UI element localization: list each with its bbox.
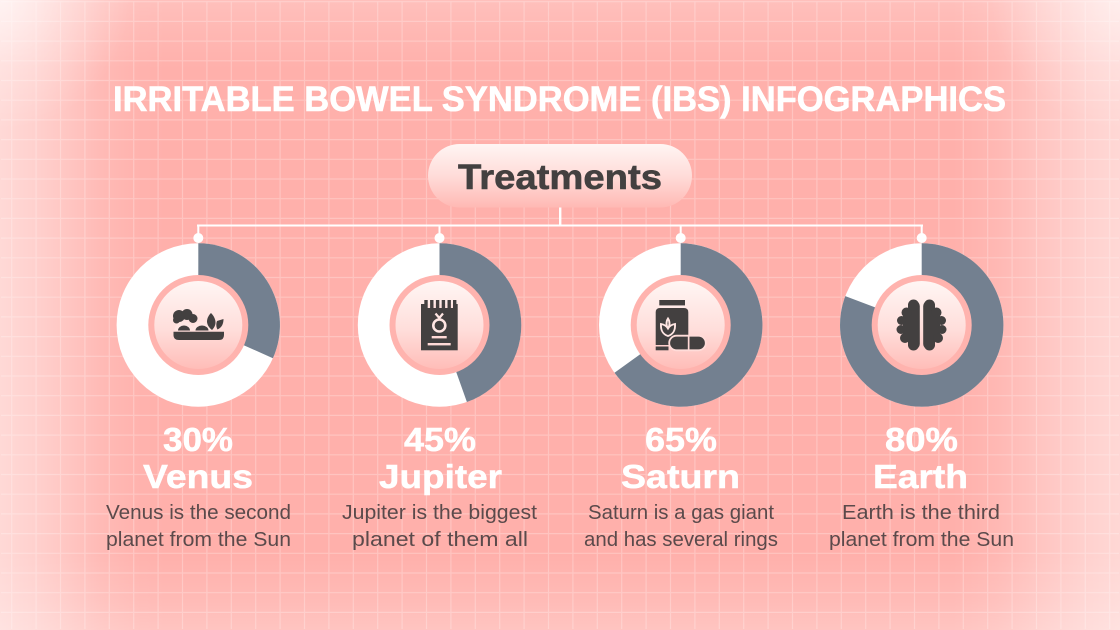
label: Saturn: and has several rings (584, 528, 778, 551)
label: Venus (106, 421, 291, 551)
label: Saturn: Saturn (621, 458, 740, 495)
label: Earth: Earth (873, 458, 968, 495)
label: Saturn: Saturn is a gas giant (588, 501, 774, 524)
label: Venus: Venus is the second (106, 501, 291, 524)
donut: Jupiter 45% (358, 243, 521, 407)
icon: diet notebook (421, 300, 458, 350)
label: Jupiter: 45% (404, 421, 476, 458)
label: Venus: Venus (143, 458, 253, 495)
icon: brain (896, 300, 946, 350)
label: Earth: planet from the Sun (829, 528, 1014, 551)
icon: herbal medicine jar and capsule (656, 300, 706, 350)
donut: Venus 30% (117, 243, 280, 407)
heading pill: Treatments: Treatments (458, 158, 662, 197)
label: Jupiter: Jupiter (379, 458, 502, 495)
donut: Earth 80% (840, 243, 1003, 407)
label: Jupiter: Jupiter is the biggest (342, 501, 537, 524)
label: Venus: 30% (163, 421, 233, 458)
label: Earth: Earth is the third (842, 501, 1000, 524)
donut: Saturn 65% (599, 243, 762, 407)
heading pill: Treatments (428, 144, 692, 208)
label: Jupiter (342, 421, 537, 551)
connector lines (193, 207, 927, 243)
icon: salad bowl (173, 309, 224, 340)
label: Venus: planet from the Sun (106, 528, 291, 551)
label: Saturn (584, 421, 778, 551)
label: Earth: 80% (885, 421, 958, 458)
label: Saturn: 65% (645, 421, 717, 458)
label: Jupiter: planet of them all (352, 528, 528, 551)
label: Earth (829, 421, 1014, 551)
title: IRRITABLE BOWEL SYNDROME (IBS) INFOGRAPHICS (113, 80, 1006, 119)
